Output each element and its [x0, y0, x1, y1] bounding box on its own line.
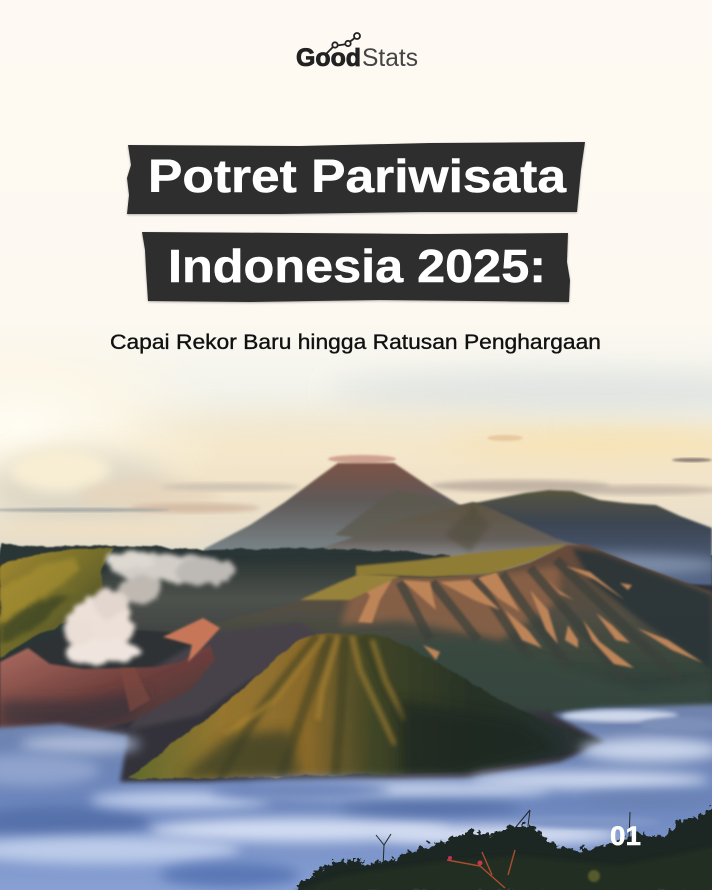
logo: GoodStats	[296, 33, 418, 72]
logo wordmark: Stats: Stats	[362, 44, 418, 72]
gullies	[396, 556, 642, 640]
logo icon: rising line chart	[326, 33, 360, 54]
terrain underlay	[0, 555, 712, 795]
page number: 01	[610, 821, 641, 851]
upper sunlit rim	[356, 544, 568, 577]
Mount Semeru cone	[204, 463, 480, 558]
title tape: line 2	[142, 232, 570, 302]
dark tree-line hills	[0, 543, 450, 660]
sunlit brown band	[340, 565, 560, 640]
foreground trees	[293, 805, 712, 890]
Bromo caldera wall with sunlit ridges	[205, 544, 712, 720]
front ridges	[300, 490, 600, 570]
title line 1 text: Potret Pariwisata	[148, 150, 566, 202]
sunlit fins	[356, 566, 703, 668]
title tape: line 1	[127, 142, 585, 214]
caldera dark face	[572, 548, 712, 670]
left golden slope	[0, 548, 114, 658]
Mount Batok cone	[128, 634, 600, 778]
central basin	[90, 558, 450, 660]
background photograph: Bromo volcanic landscape	[0, 348, 712, 890]
subtitle: Capai Rekor Baru hingga Ratusan Penghargaan	[110, 331, 601, 354]
far mountain ridge	[440, 490, 712, 585]
sea of clouds	[0, 704, 712, 890]
Batok dark gullies	[216, 634, 370, 778]
Batok lit ribs	[225, 636, 405, 745]
logo wordmark: Good: Good	[296, 44, 361, 72]
slope between crater and Batok	[130, 622, 330, 730]
volcanic smoke plumes	[61, 551, 235, 664]
sky	[0, 0, 712, 570]
crater interior	[30, 630, 220, 670]
title line 2 text: Indonesia 2025:	[168, 240, 546, 292]
valley mist	[500, 554, 712, 576]
Bromo crater rim	[0, 618, 220, 735]
